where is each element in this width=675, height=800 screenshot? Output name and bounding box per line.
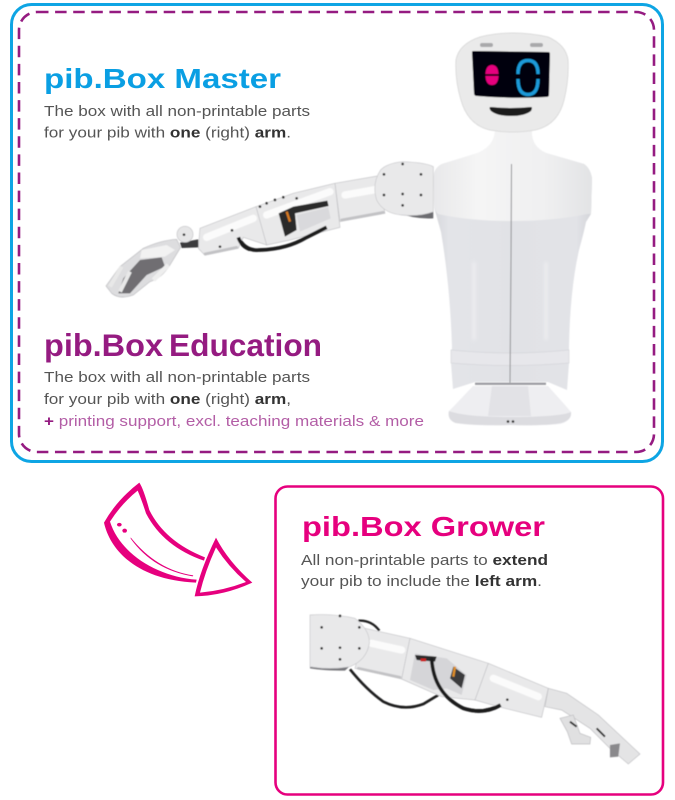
cable bbox=[238, 227, 327, 250]
upper arm bbox=[335, 176, 385, 222]
heading: pib.Box Education: pib.Box bbox=[44, 327, 163, 363]
heading: pib.Box Grower: pib.Box Grower bbox=[302, 511, 545, 542]
text block: Education description: The box with all non-printable parts bbox=[44, 370, 310, 386]
panel: pib.Box Grower bbox=[276, 486, 663, 794]
arrow head bbox=[195, 538, 252, 596]
text block: Education description bbox=[44, 370, 424, 430]
left arm bbox=[310, 615, 640, 764]
robot base bbox=[449, 382, 571, 425]
arrow shaft highlight bbox=[131, 537, 193, 576]
text block: Education description: for your pib with one (right) arm , bbox=[44, 392, 291, 408]
pink border bbox=[276, 486, 663, 794]
lower forearm bbox=[198, 207, 267, 255]
robot with right arm extended bbox=[106, 33, 592, 425]
lower forearm bbox=[475, 663, 548, 717]
upper arm bbox=[355, 628, 410, 679]
arrow shaft bbox=[104, 483, 205, 583]
forearm bbox=[256, 183, 340, 245]
blue eye bbox=[518, 60, 538, 94]
extended right arm bbox=[106, 162, 433, 297]
robot torso bbox=[433, 128, 592, 390]
pink eye bbox=[486, 65, 498, 85]
forearm bbox=[402, 638, 488, 700]
hand bbox=[545, 688, 640, 764]
heading: pib.Box Master: pib.Box Master bbox=[44, 63, 281, 94]
shoulder block bbox=[310, 665, 350, 671]
arm cables bbox=[350, 621, 438, 707]
heading: pib.Box Education: Education bbox=[169, 327, 322, 363]
purple dashed inner border bbox=[19, 12, 654, 452]
text block: Education description: + printing support, excl. teaching materials & more bbox=[44, 414, 424, 430]
text block: Master description: for your pib with one (right) arm . bbox=[44, 126, 291, 142]
face screen bbox=[472, 51, 550, 98]
shoulder joint bbox=[398, 212, 433, 218]
robot head bbox=[456, 33, 568, 132]
text block: Master description: The box with all non-printable parts bbox=[44, 104, 310, 120]
heading: pib.Box Education bbox=[44, 327, 322, 363]
arrow dots bbox=[117, 523, 127, 533]
mouth bbox=[490, 107, 532, 116]
speaker grilles bbox=[480, 43, 543, 47]
wrist bbox=[177, 226, 198, 248]
blue outer border bbox=[12, 4, 662, 462]
text block: Grower description bbox=[301, 553, 548, 590]
text block: Grower description: All non-printable parts to extend bbox=[301, 553, 548, 569]
text block: Master description bbox=[44, 104, 310, 142]
text block: Grower description: your pib to include the left arm . bbox=[301, 574, 542, 590]
arrow pointing to pib.Box Grower bbox=[104, 483, 252, 596]
hand bbox=[106, 239, 181, 297]
